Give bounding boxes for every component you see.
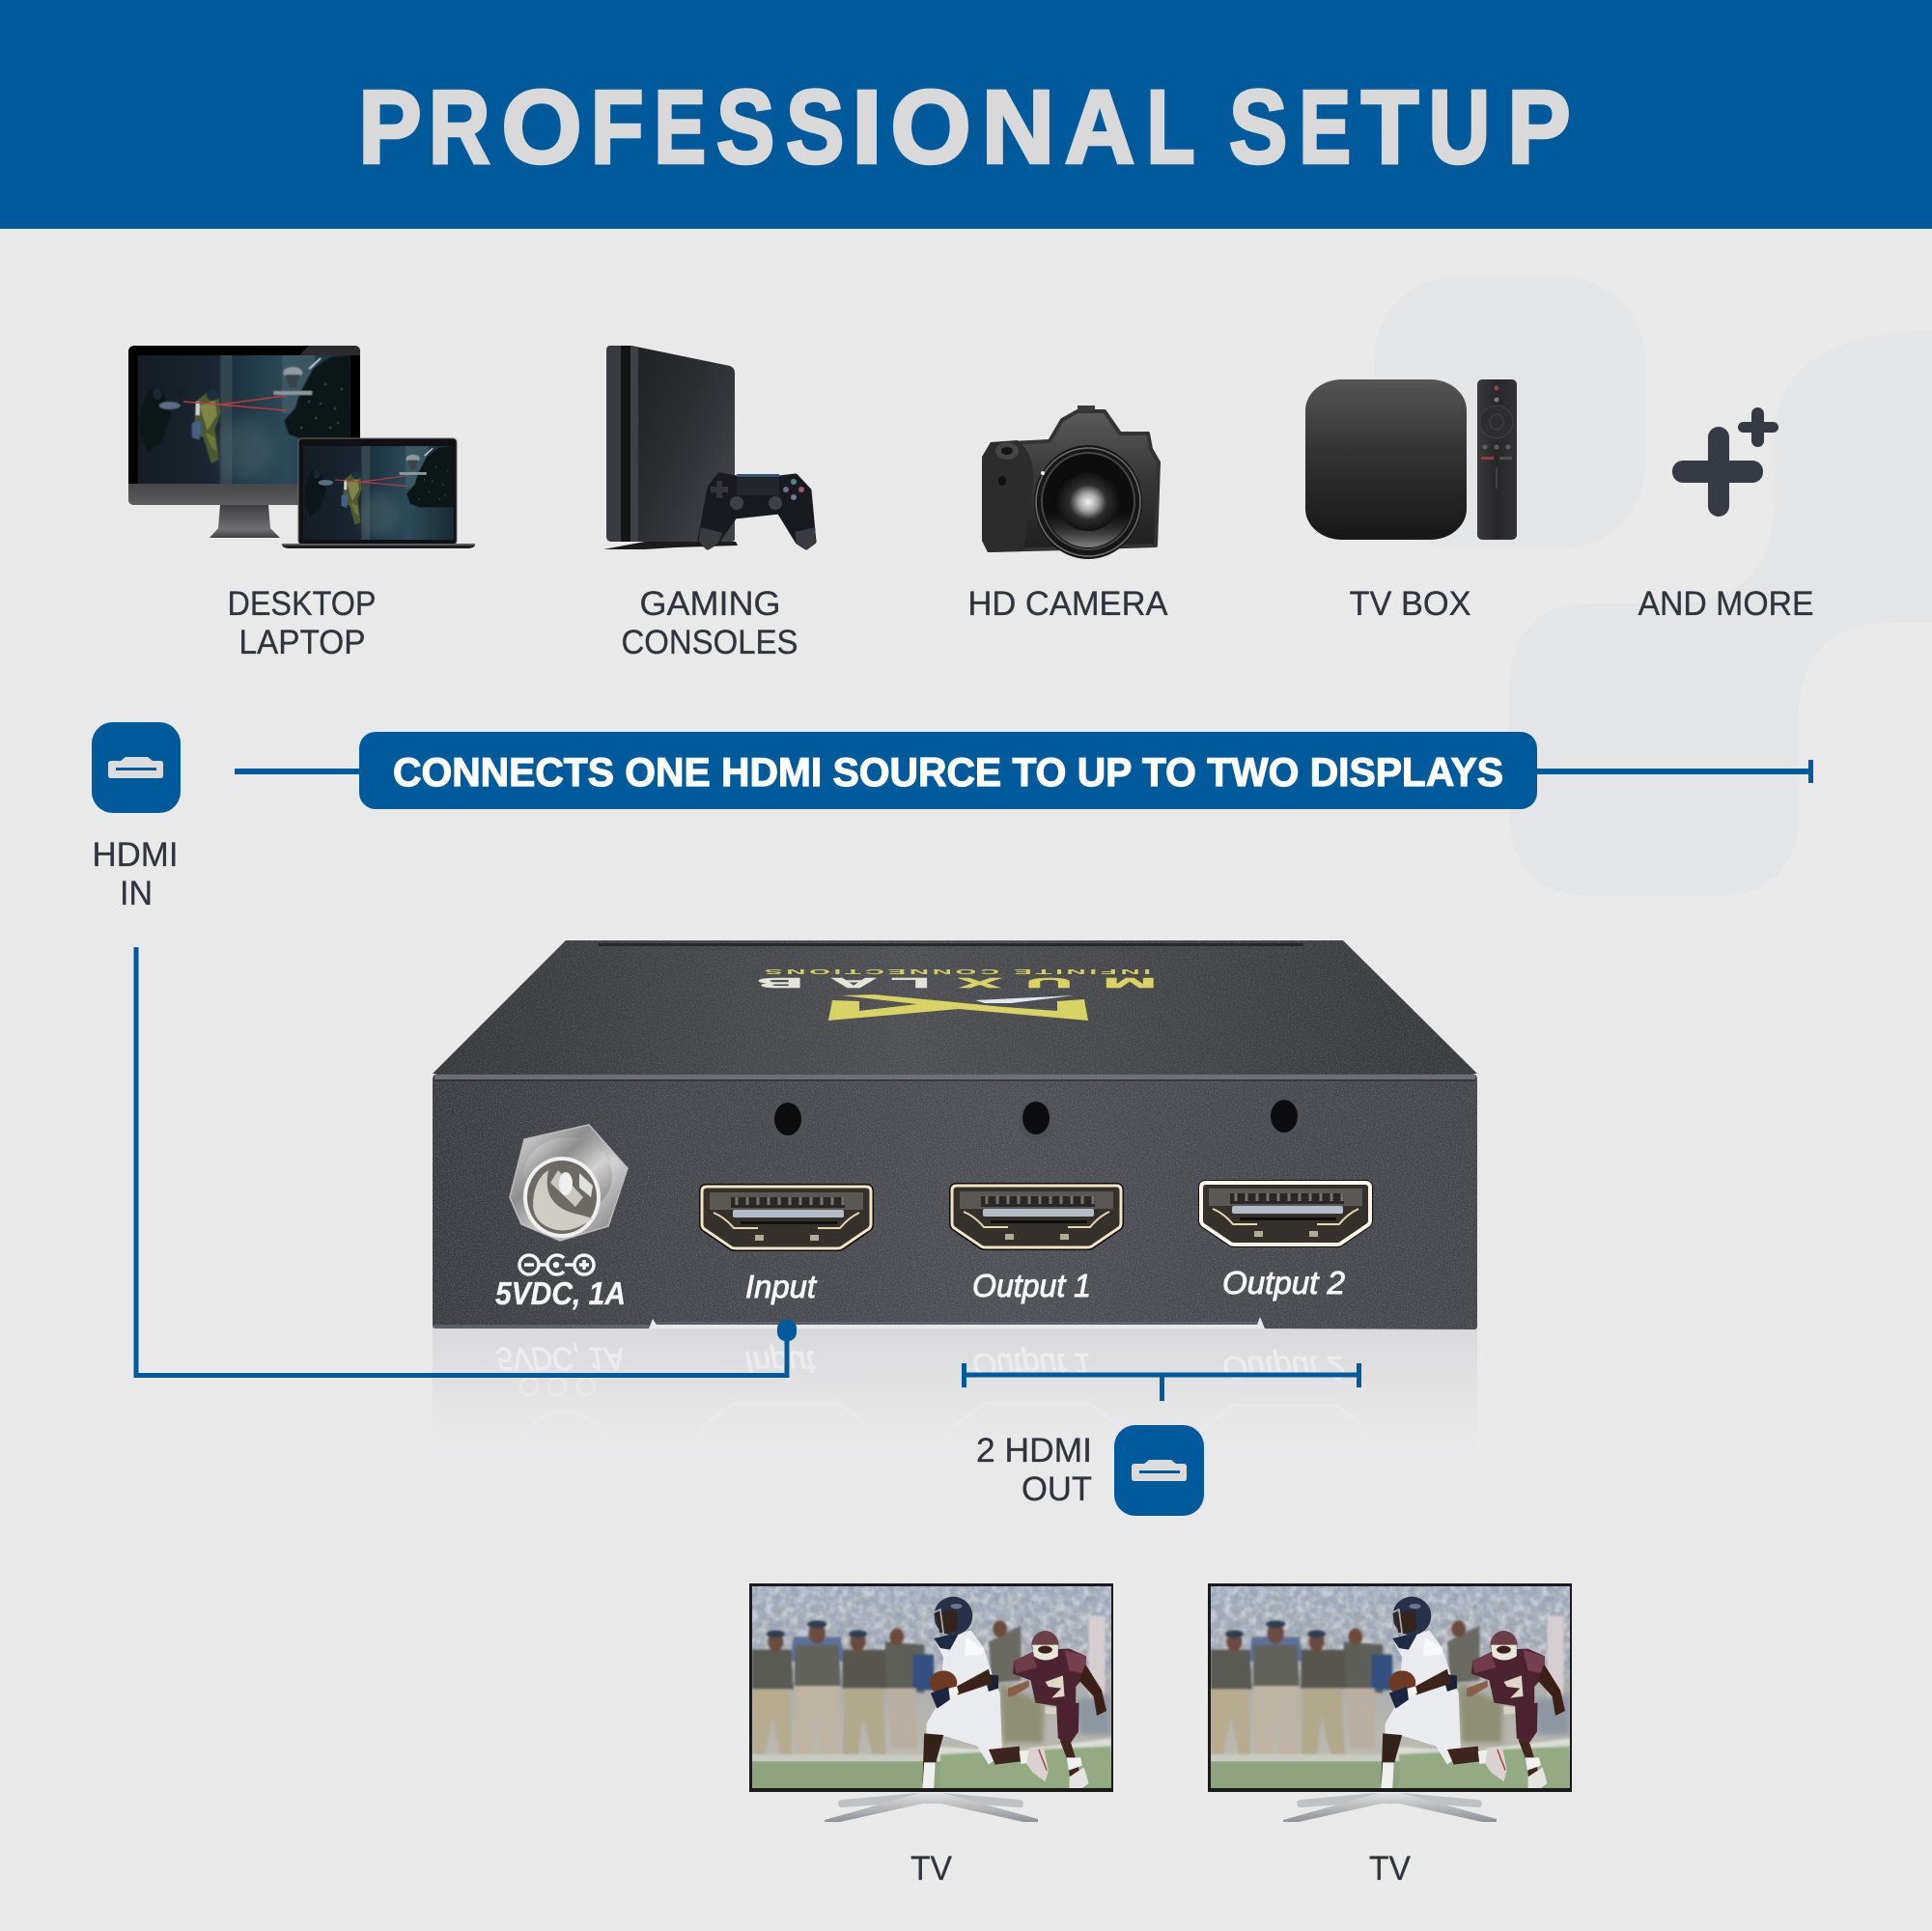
label: and more: AND MORE	[1638, 585, 1813, 623]
title: O	[890, 68, 971, 185]
title: U	[1429, 68, 1490, 185]
stand	[1283, 1793, 1497, 1822]
icon: desktop monitor and laptop	[128, 346, 475, 548]
title: S	[716, 68, 774, 185]
icon: gaming console and controller	[603, 346, 814, 549]
title: S	[786, 68, 844, 185]
connector line to banner	[235, 760, 1813, 783]
label: HDMI in: HDMI	[93, 836, 178, 874]
icon: HD camera	[982, 406, 1159, 559]
label: TV box: TV BOX	[1350, 585, 1471, 623]
title: T	[1361, 68, 1418, 185]
logo: INFINITE CONNECTIONS	[765, 967, 1151, 975]
title: I	[852, 68, 882, 185]
port label: output 2: Output 2	[1222, 1265, 1345, 1301]
logo: A	[830, 975, 877, 991]
device reflection: Input	[744, 1345, 817, 1381]
label: gaming consoles	[622, 585, 798, 661]
label: gaming consoles: GAMING	[639, 585, 780, 623]
device reflection: Output 1	[972, 1347, 1091, 1383]
title: A	[1065, 68, 1134, 185]
controller	[700, 474, 814, 548]
monitor	[128, 346, 360, 538]
icon: HDMI in	[92, 722, 181, 813]
banner text: CONNECTS ONE HDMI SOURCE TO UP TO TWO DISPLAYS	[393, 749, 1503, 795]
title: S	[1229, 68, 1287, 185]
label: 2 HDMI out: OUT	[1022, 1470, 1092, 1508]
HDMI port: output 1	[952, 1186, 1121, 1247]
power label: 5VDC, 1A	[495, 1275, 626, 1311]
title: L	[1147, 68, 1193, 185]
TV right	[1208, 1583, 1572, 1822]
title: O	[501, 68, 582, 185]
icon: TV box and remote	[1305, 379, 1517, 540]
title: E	[1299, 68, 1351, 185]
HDMI out bracket	[962, 1363, 1361, 1401]
label: TV left: TV	[910, 1850, 953, 1888]
TV left	[749, 1583, 1113, 1822]
label: HD camera: HD CAMERA	[967, 585, 1168, 623]
remote	[1477, 379, 1517, 540]
title: E	[654, 68, 706, 185]
title: R	[429, 68, 490, 185]
mounting holes	[770, 1099, 1302, 1142]
label: TV right: TV	[1369, 1850, 1412, 1888]
HDMI in connection line	[136, 947, 797, 1375]
HDMI port: input	[702, 1187, 871, 1248]
label: 2 HDMI out	[976, 1432, 1092, 1508]
device: HDMI splitter	[433, 940, 1477, 1329]
logo: U	[1025, 975, 1073, 991]
label: desktop laptop	[228, 585, 377, 661]
label: HDMI in	[93, 836, 178, 912]
label: gaming consoles: CONSOLES	[622, 624, 798, 661]
title: P	[1507, 68, 1571, 185]
stand	[825, 1793, 1038, 1822]
icon: plus signs	[1672, 407, 1778, 517]
label: HDMI in: IN	[120, 875, 153, 912]
banner	[359, 732, 1537, 809]
label: desktop laptop: LAPTOP	[239, 624, 365, 661]
title: N	[982, 68, 1054, 185]
top face	[433, 940, 1477, 1074]
title: P	[358, 68, 422, 185]
device reflection: 5VDC, 1A	[496, 1341, 624, 1377]
laptop	[282, 438, 475, 548]
label: desktop laptop: DESKTOP	[228, 585, 377, 623]
tv box	[1305, 379, 1467, 540]
logo: M	[1103, 975, 1157, 991]
power label	[495, 1255, 626, 1311]
front face	[433, 1074, 1477, 1329]
label: 2 HDMI out: 2 HDMI	[976, 1432, 1092, 1469]
title: F	[591, 68, 644, 185]
logo	[757, 967, 1157, 1021]
console	[603, 346, 738, 549]
power connector	[510, 1125, 628, 1241]
icon: HDMI out	[1114, 1425, 1204, 1516]
device reflection: Output 2	[1222, 1350, 1345, 1385]
logo: X	[959, 975, 1001, 991]
HDMI port: output 2	[1201, 1183, 1370, 1245]
logo: L	[891, 975, 930, 991]
header band	[0, 0, 1932, 229]
background decorative shapes	[1374, 277, 1932, 896]
device reflection	[433, 1329, 1477, 1379]
logo: B	[757, 975, 803, 991]
port label: output 1: Output 1	[972, 1268, 1091, 1303]
port label: input: Input	[745, 1269, 818, 1304]
